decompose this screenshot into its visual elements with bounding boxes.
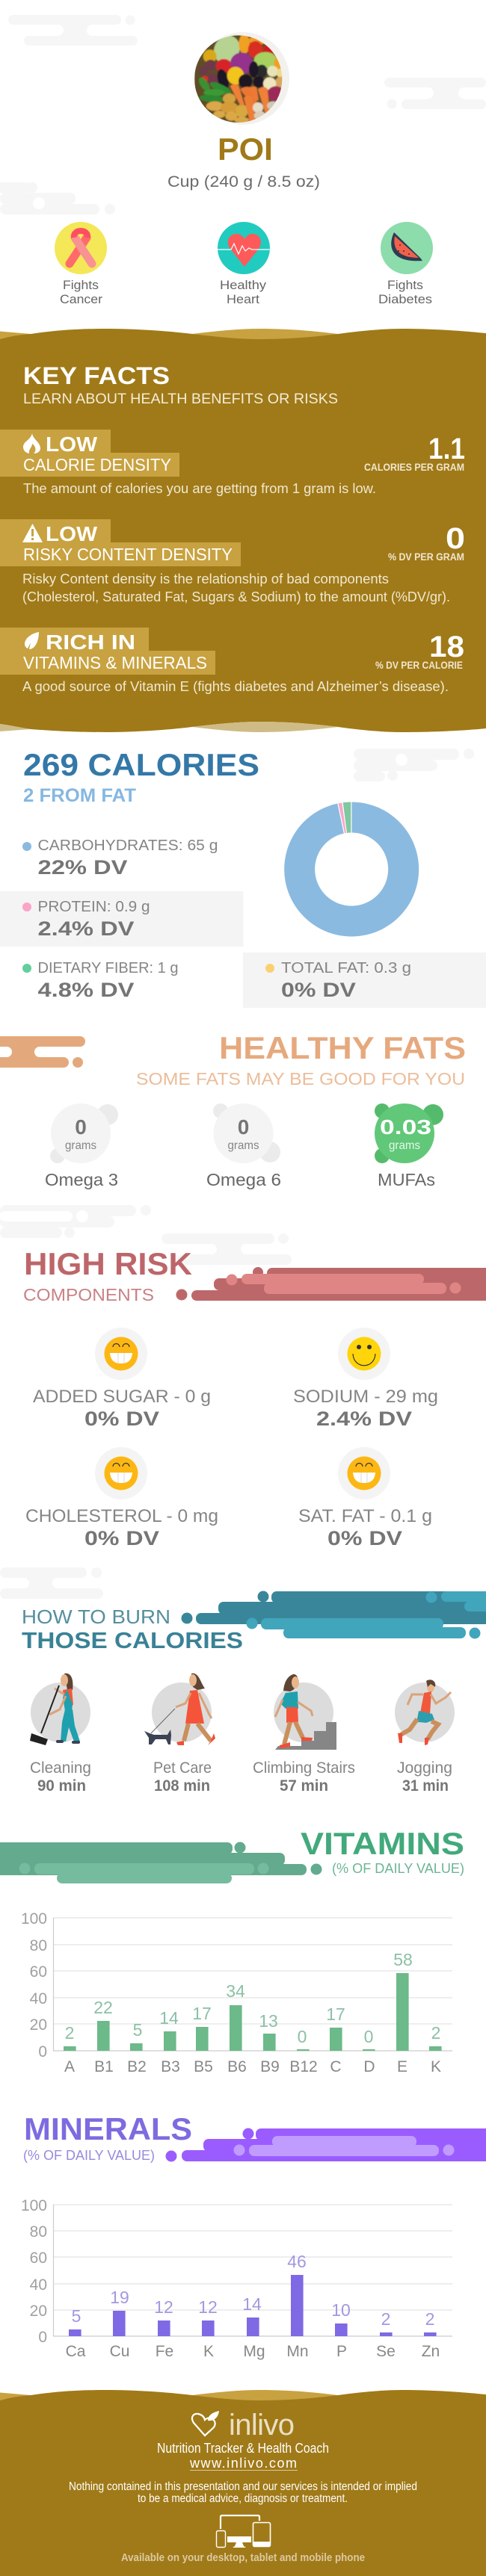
bar chart: vitamins: 22 — [93, 1998, 113, 2017]
availability note: Available on your desktop, tablet and mobile phone — [121, 2551, 365, 2564]
risk item: sodium: SODIUM - 29 mg — [293, 1387, 438, 1407]
legend: dietary fiber: 4.8% DV — [37, 979, 135, 1001]
bar chart: vitamins: B6 — [227, 2058, 247, 2075]
stat: omega 6: Omega 6 — [206, 1170, 281, 1189]
activity labels: 90 min — [37, 1777, 86, 1795]
activity labels: 57 min — [280, 1777, 328, 1795]
legend: total fat — [243, 953, 486, 1008]
bar chart: minerals: Mg — [243, 2343, 265, 2360]
stat: omega 3: 0 — [75, 1115, 87, 1139]
legend: protein: 2.4% DV — [37, 917, 135, 940]
bar chart: vitamins — [21, 1910, 452, 2075]
legend: protein: PROTEIN: 0.9 g — [37, 899, 150, 915]
activity labels: Pet Care — [153, 1759, 212, 1777]
bar chart: vitamins: B2 — [127, 2058, 147, 2075]
bar chart: minerals: 40 — [30, 2276, 47, 2294]
bar chart: vitamins: 0 — [38, 2043, 47, 2061]
bar chart: minerals: Fe — [156, 2343, 173, 2360]
bar chart: vitamins: 5 — [133, 2020, 142, 2040]
heading: 269 CALORIES — [23, 747, 259, 782]
fact: rich in vitamins and minerals: RICH IN — [46, 631, 135, 654]
legend: total fat: 0% DV — [281, 979, 356, 1001]
icon: fights diabetes — [378, 222, 433, 306]
bar chart: vitamins: B9 — [260, 2058, 280, 2075]
fact: calorie density: CALORIE DENSITY — [23, 455, 171, 474]
decorative heading shape — [0, 1842, 322, 1883]
fact: risky content density: LOW — [46, 522, 98, 545]
bar chart: vitamins: 13 — [259, 2011, 278, 2031]
fact: rich in vitamins and minerals — [0, 628, 464, 694]
stat: MUFAs — [375, 1103, 443, 1189]
fact: rich in vitamins and minerals: VITAMINS & MINERALS — [23, 653, 207, 672]
legend: dietary fiber — [22, 960, 178, 1001]
subheading: COMPONENTS — [23, 1285, 154, 1304]
bar chart: vitamins: 2 — [431, 2023, 440, 2043]
activity labels: Climbing Stairs — [253, 1759, 355, 1777]
risk item: cholesterol — [25, 1447, 218, 1549]
icon: flame — [23, 433, 40, 453]
heading: HEALTHY FATS — [219, 1030, 466, 1065]
bar chart: minerals: 20 — [30, 2303, 47, 2320]
risk item: saturated fat: 0% DV — [327, 1527, 402, 1549]
decorative heading shape — [166, 2128, 486, 2162]
bar chart: vitamins: 0 — [364, 2027, 373, 2046]
stat: omega 6: 0 — [238, 1115, 249, 1139]
heading: HIGH RISK — [24, 1246, 192, 1281]
bar chart: minerals — [21, 2197, 452, 2360]
stat: omega 6 — [206, 1103, 281, 1189]
fact: risky content density: Risky Content density is the relationship of bad components — [22, 572, 389, 586]
legend: total fat: TOTAL FAT: 0.3 g — [281, 960, 411, 976]
disclaimer: to be a medical advice, diagnosis or treatment. — [138, 2492, 348, 2505]
risk item: sodium — [293, 1328, 438, 1430]
food photo — [194, 28, 292, 127]
stat: omega 6: grams — [227, 1139, 259, 1152]
panel: key facts — [0, 329, 486, 732]
bar chart: vitamins: 0 — [298, 2027, 307, 2046]
stat: MUFAs: 0.03 — [380, 1115, 431, 1139]
bar chart: vitamins: B1 — [94, 2058, 114, 2075]
bar chart: vitamins: 17 — [326, 2004, 345, 2024]
donut chart — [284, 802, 419, 936]
stat: omega 3: Omega 3 — [45, 1170, 118, 1189]
risk item: cholesterol: CHOLESTEROL - 0 mg — [25, 1506, 218, 1526]
icon: fights diabetes: Diabetes — [378, 292, 432, 306]
risk item: added sugar: 0% DV — [84, 1408, 159, 1430]
activity: jogging — [395, 1679, 455, 1745]
bar chart: vitamins: D — [363, 2058, 375, 2075]
panel: how to burn those calories: THOSE CALORIES — [22, 1627, 243, 1653]
legend: dietary fiber: DIETARY FIBER: 1 g — [37, 960, 178, 976]
bar chart: minerals: 2 — [381, 2309, 390, 2329]
bar chart: vitamins: B3 — [161, 2058, 180, 2075]
disclaimer: Nothing contained in this presentation and our services is intended or implied — [69, 2480, 417, 2493]
legend: carbohydrates: 22% DV — [37, 856, 127, 879]
activity: cleaning — [30, 1674, 90, 1745]
fact: risky content density: RISKY CONTENT DENSITY — [23, 545, 233, 564]
bar chart: minerals: Ca — [66, 2343, 86, 2360]
stat: omega 3: grams — [65, 1139, 96, 1152]
fact: calorie density: CALORIES PER GRAM — [364, 462, 464, 473]
bar chart: vitamins: 17 — [192, 2004, 212, 2023]
risk item: added sugar: ADDED SUGAR - 0 g — [33, 1387, 211, 1407]
fact: risky content density: 0 — [446, 522, 465, 555]
bar chart: minerals: 12 — [198, 2297, 218, 2317]
bar chart: vitamins: K — [431, 2058, 441, 2075]
icon: warning triangle — [22, 524, 43, 542]
fact: risky content density: % DV PER GRAM — [388, 551, 464, 563]
panel: how to burn those calories — [22, 1591, 486, 1795]
heading: MINERALS — [24, 2111, 192, 2146]
bar chart: vitamins: 58 — [393, 1950, 413, 1969]
bar chart: vitamins: 60 — [30, 1963, 47, 1981]
activity labels — [30, 1759, 452, 1795]
subheading: LEARN ABOUT HEALTH BENEFITS OR RISKS — [23, 391, 338, 407]
panel: vitamins — [0, 1826, 464, 2075]
footer — [0, 2390, 486, 2576]
fact: rich in vitamins and minerals: % DV PER CALORIE — [375, 660, 463, 671]
bar chart: minerals: Se — [376, 2343, 396, 2360]
heading: HOW TO BURN — [22, 1606, 170, 1628]
bar chart: vitamins: 2 — [65, 2023, 74, 2043]
bar chart: minerals: 10 — [331, 2300, 351, 2320]
activity labels: Jogging — [397, 1759, 452, 1777]
bar chart: minerals: 5 — [72, 2306, 81, 2326]
icon: fights cancer — [55, 222, 107, 306]
bar chart: minerals: 60 — [30, 2250, 47, 2267]
bar chart: minerals: P — [336, 2343, 347, 2360]
logo: inlivo — [229, 2409, 295, 2442]
website: www.inlivo.com — [189, 2456, 297, 2471]
legend: carbohydrates — [22, 837, 218, 879]
icon: fights diabetes: Fights — [387, 278, 423, 292]
legend: carbohydrates: CARBOHYDRATES: 65 g — [37, 837, 218, 854]
icon: leaf — [25, 632, 39, 649]
health benefit icons — [55, 222, 433, 306]
bar chart: vitamins: B12 — [289, 2058, 318, 2075]
bar chart: minerals: Zn — [422, 2343, 440, 2360]
risk item: cholesterol: 0% DV — [84, 1527, 159, 1549]
risk item: saturated fat — [298, 1447, 432, 1549]
bar chart: vitamins: 34 — [226, 1981, 245, 2001]
fact: calorie density: LOW — [46, 433, 98, 456]
icon: fights cancer: Cancer — [60, 292, 102, 306]
fact: risky content density — [0, 519, 465, 604]
subheading: SOME FATS MAY BE GOOD FOR YOU — [136, 1069, 465, 1089]
panel: high risk components — [23, 1246, 486, 1549]
icon: devices — [217, 2515, 271, 2548]
bar chart: vitamins: A — [64, 2058, 75, 2075]
heading: VITAMINS — [301, 1826, 464, 1861]
icon: healthy heart — [218, 222, 270, 306]
icon: healthy heart: Heart — [227, 292, 259, 306]
fact: calorie density: The amount of calories you are getting from 1 gram is low. — [23, 481, 376, 496]
title: POI — [218, 131, 273, 167]
bar chart: vitamins: 80 — [30, 1937, 47, 1954]
bar chart: minerals: 14 — [242, 2294, 262, 2314]
fact: calorie density: 1.1 — [428, 433, 465, 465]
risk item: saturated fat: SAT. FAT - 0.1 g — [298, 1506, 432, 1526]
header: food photo, title and serving — [167, 28, 320, 191]
risk item: added sugar — [33, 1328, 211, 1430]
fact: rich in vitamins and minerals: A good source of Vitamin E (fights diabetes and Alzheimer’s disease). — [22, 679, 449, 694]
panel: minerals — [21, 2111, 486, 2360]
bar chart: minerals: Mn — [286, 2343, 309, 2360]
bar chart: vitamins: 20 — [30, 2016, 47, 2034]
decorative heading shape — [0, 1036, 94, 1068]
stat: MUFAs: grams — [389, 1139, 420, 1152]
subheading: 2 FROM FAT — [23, 785, 136, 806]
stat: omega 3 — [45, 1103, 118, 1189]
activity labels: 31 min — [402, 1777, 449, 1795]
risk item: sodium: 2.4% DV — [316, 1408, 412, 1430]
activity: climbing stairs — [274, 1674, 336, 1750]
bar chart: minerals: 80 — [30, 2223, 47, 2241]
fact: rich in vitamins and minerals: 18 — [429, 631, 464, 663]
bar chart: vitamins: B5 — [194, 2058, 213, 2075]
subheading: (% OF DAILY VALUE) — [23, 2148, 155, 2163]
bar chart: minerals: 46 — [287, 2252, 307, 2271]
bar chart: vitamins: 14 — [159, 2008, 179, 2028]
heading: KEY FACTS — [23, 362, 170, 389]
activity: pet care — [144, 1674, 215, 1745]
legend: protein — [0, 891, 244, 947]
icon: fights cancer: Fights — [63, 278, 99, 292]
bar chart: minerals: Cu — [110, 2343, 129, 2360]
activity labels: Cleaning — [30, 1759, 91, 1777]
logo — [192, 2409, 295, 2442]
fact: calorie density — [0, 430, 465, 496]
activity labels: 108 min — [154, 1777, 210, 1795]
panel: healthy fats — [0, 1030, 466, 1189]
bar chart: minerals: 12 — [154, 2297, 173, 2317]
bar chart: vitamins: 100 — [21, 1910, 47, 1928]
bar chart: minerals: 0 — [38, 2329, 47, 2346]
subheading: (% OF DAILY VALUE) — [332, 1861, 464, 1876]
panel: calories — [0, 747, 486, 1008]
fact: risky content density: (Cholesterol, Saturated Fat, Sugars & Sodium) to the amount (%DV/gr). — [22, 589, 450, 604]
bar chart: vitamins: C — [330, 2058, 342, 2075]
bar chart: minerals: 2 — [425, 2309, 434, 2329]
serving size: Cup (240 g / 8.5 oz) — [167, 173, 320, 191]
stat: MUFAs: MUFAs — [378, 1170, 435, 1189]
bar chart: vitamins: 40 — [30, 1990, 47, 2007]
decorative heading shape — [181, 1591, 486, 1639]
decorative heading shape — [176, 1267, 486, 1301]
tagline: Nutrition Tracker & Health Coach — [157, 2441, 329, 2456]
bar chart: minerals: K — [203, 2343, 214, 2360]
disclaimer — [69, 2480, 417, 2505]
bar chart: vitamins: E — [397, 2058, 407, 2075]
icon: healthy heart: Healthy — [220, 278, 267, 292]
bar chart: minerals: 100 — [21, 2197, 47, 2214]
bar chart: minerals: 19 — [110, 2288, 129, 2307]
